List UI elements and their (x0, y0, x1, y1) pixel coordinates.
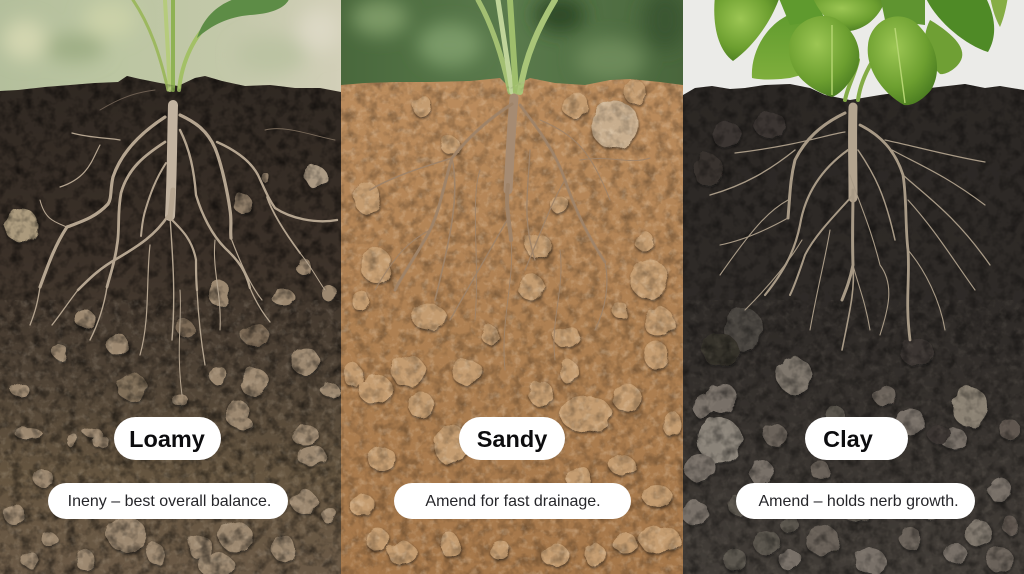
pill: Loamy description (48, 483, 288, 519)
pale background (683, 0, 1024, 100)
pill: Clay description (736, 483, 975, 519)
soil texture (0, 76, 341, 574)
pill: Loamy (114, 417, 221, 460)
pill: Sandy: Sandy (477, 426, 547, 452)
plant stems and leaf (133, 0, 290, 90)
pill: Sandy description: Amend for fast drainage. (425, 493, 601, 510)
pill: Sandy description (394, 483, 631, 519)
plant stems (478, 0, 555, 92)
rocks: sandy (344, 80, 681, 567)
basil plant (714, 0, 1008, 105)
soil body (341, 78, 683, 574)
pill: Clay (805, 417, 908, 460)
blurred foliage background (341, 0, 683, 85)
soil body (0, 76, 341, 574)
panel: loamy soil (0, 0, 342, 574)
panel: sandy soil (341, 0, 687, 574)
blurred garden background (0, 0, 342, 100)
pill: Loamy description: Ineny – best overall balance. (68, 493, 271, 510)
pill: Sandy (459, 417, 565, 460)
rocks: loamy (4, 166, 339, 574)
pill: Clay description: Amend – holds nerb growth. (758, 493, 959, 510)
rocks: clay (681, 112, 1021, 574)
roots: loamy (30, 90, 337, 395)
roots: clay (710, 107, 990, 350)
soil texture (683, 84, 1024, 574)
pill: Loamy: Loamy (129, 426, 205, 452)
pill: Clay: Clay (823, 426, 873, 452)
panel: clay soil (681, 0, 1024, 574)
roots: sandy (370, 98, 650, 370)
soil texture (341, 78, 683, 574)
soil body (683, 84, 1024, 574)
